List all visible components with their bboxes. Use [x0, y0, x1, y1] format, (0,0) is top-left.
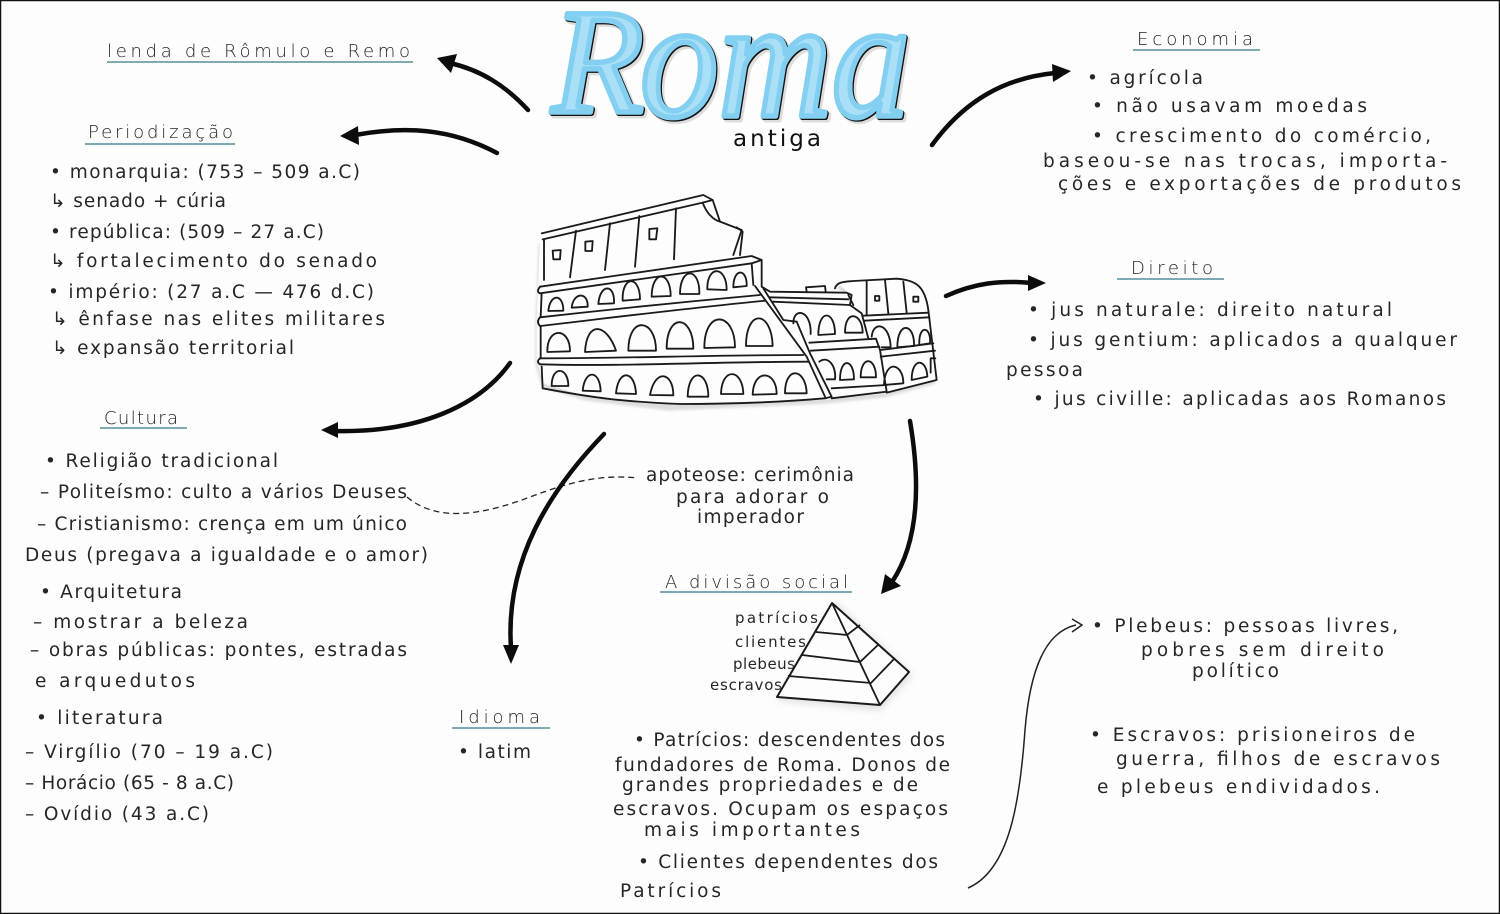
- pyramid labels: patrícios: [735, 609, 818, 627]
- text: patrícios e clientes: mais importantes: [644, 820, 860, 841]
- illustration: Coliseu: [535, 195, 937, 411]
- panel: lenda de Rômulo e Remo: lenda de Rômulo e Remo: [107, 41, 410, 62]
- arrow: to Idioma: [503, 434, 604, 664]
- arrow: to Economia: [932, 64, 1071, 145]
- arrow: to Plebeus: [968, 619, 1082, 888]
- top storey: [542, 195, 742, 255]
- arrow: to Cultura: [321, 363, 510, 438]
- text: plebeus: • Plebeus: pessoas livres,: [1092, 616, 1398, 637]
- text: direito: • jus civille: aplicadas aos Romanos: [1033, 389, 1446, 410]
- text: arquitetura: [30, 582, 407, 692]
- callout: apoteose: para adorar o: [676, 487, 829, 508]
- list: períodos de Roma: ↳ ênfase nas elites militares: [52, 309, 385, 330]
- list: períodos de Roma: • império: (27 a.C — 476 d.C): [48, 282, 374, 303]
- text: arquitetura: – mostrar a beleza: [33, 612, 248, 633]
- text: patrícios e clientes: • Patrícios: descendentes dos: [634, 730, 945, 751]
- panel: Periodização: [48, 122, 385, 359]
- dashed connector: apoteose to Politeísmo: [407, 477, 638, 513]
- panel: Direito: [1006, 258, 1457, 410]
- callout: apoteose: imperador: [697, 507, 804, 528]
- text: direito: pessoa: [1006, 360, 1083, 381]
- text: economia: • não usavam moedas: [1092, 96, 1367, 117]
- text: patrícios e clientes: escravos. Ocupam os espaços: [613, 799, 948, 820]
- text: escravos: guerra, filhos de escravos: [1116, 749, 1440, 770]
- list: períodos de Roma: • monarquia: (753 – 509 a.C): [50, 162, 360, 183]
- list: períodos de Roma: • república: (509 – 27 a.C): [50, 222, 324, 243]
- list: períodos de Roma: ↳ fortalecimento do senado: [50, 251, 377, 272]
- callout: apoteose: apoteose: cerimônia: [646, 465, 854, 486]
- panel: Economia: [1043, 29, 1461, 195]
- heading: Direito: Direito: [1131, 258, 1213, 279]
- panel: Idioma: • latim: [458, 742, 531, 763]
- pyramid: [777, 603, 912, 710]
- text: religião: – Politeísmo: culto a vários Deuses: [40, 482, 407, 503]
- text: literatura: – Ovídio (43 a.C): [25, 804, 209, 825]
- text: arquitetura: – obras públicas: pontes, estradas: [30, 640, 407, 661]
- ground storey: [542, 367, 825, 404]
- pyramid labels: clientes: [735, 633, 806, 651]
- list: períodos de Roma: [48, 162, 385, 359]
- text: escravos: e plebeus endividados.: [1097, 777, 1380, 798]
- text: escravos: • Escravos: prisioneiros de: [1090, 725, 1415, 746]
- text: patrícios e clientes: fundadores de Roma. Donos de: [615, 755, 950, 776]
- arrow: to lenda de Rômulo e Remo: [437, 54, 528, 110]
- text: arquitetura: e arquedutos: [35, 671, 195, 692]
- heading: Cultura: Cultura: [104, 408, 178, 429]
- title: Roma antiga: antiga: [733, 126, 821, 152]
- text: plebeus: pobres sem direito: [1141, 640, 1384, 661]
- text: economia: baseou-se nas trocas, importa-: [1043, 151, 1447, 172]
- arrow: to A divisão social: [881, 421, 916, 594]
- text: patrícios e clientes: grandes propriedades e de: [622, 775, 918, 796]
- pyramid labels: [710, 609, 818, 694]
- second storey: [538, 327, 543, 358]
- text: patrícios e clientes: Patrícios: [620, 881, 721, 902]
- list: períodos de Roma: ↳ expansão territorial: [52, 338, 294, 359]
- text: patrícios e clientes: • Clientes dependentes dos: [638, 852, 938, 873]
- text: economia: [1043, 68, 1461, 195]
- text: literatura: – Horácio (65 - 8 a.C): [25, 773, 234, 794]
- heading: Economia: Economia: [1137, 29, 1253, 50]
- text: direito: • jus naturale: direito natural: [1028, 300, 1392, 321]
- pyramid labels: plebeus: [733, 655, 795, 673]
- text: plebeus: político: [1192, 661, 1279, 682]
- panel: A divisão social: [613, 572, 950, 902]
- heading: Periodização: Periodização: [88, 122, 233, 143]
- text: patrícios e clientes: [613, 730, 950, 902]
- text: literatura: • literatura: [36, 708, 163, 729]
- lower right wing: [809, 339, 887, 398]
- text: religião: – Cristianismo: crença em um único: [37, 514, 407, 535]
- pyramid labels: escravos: [710, 676, 782, 694]
- text: economia: • crescimento do comércio,: [1092, 126, 1431, 147]
- text: plebeus: [1092, 616, 1398, 682]
- panel: Idioma: Idioma: [459, 707, 540, 728]
- text: religião: • Religião tradicional: [45, 451, 278, 472]
- text: economia: • agrícola: [1087, 68, 1203, 89]
- far right tower: [835, 279, 937, 393]
- arrow: to Periodização: [340, 126, 497, 153]
- text: direito: • jus gentium: aplicados a qualquer: [1028, 330, 1457, 351]
- text: religião: [25, 451, 428, 566]
- text: literatura: [25, 708, 273, 825]
- panel: Idioma: [452, 707, 550, 763]
- arrow: to Direito: [946, 275, 1046, 296]
- text: escravos: [1090, 725, 1440, 798]
- list: períodos de Roma: ↳ senado + cúria: [50, 191, 226, 212]
- text: economia: ções e exportações de produtos: [1058, 174, 1461, 195]
- callout: apoteose: [646, 465, 854, 528]
- text: literatura: – Virgílio (70 – 19 a.C): [25, 742, 273, 763]
- text: religião: Deus (pregava a igualdade e o amor): [25, 545, 428, 566]
- panel: Cultura: [25, 408, 428, 825]
- text: arquitetura: • Arquitetura: [40, 582, 182, 603]
- broken diagonal: [755, 286, 825, 397]
- third storey: [540, 256, 762, 287]
- text: direito: [1006, 300, 1457, 410]
- heading: A divisão social: A divisão social: [665, 572, 848, 593]
